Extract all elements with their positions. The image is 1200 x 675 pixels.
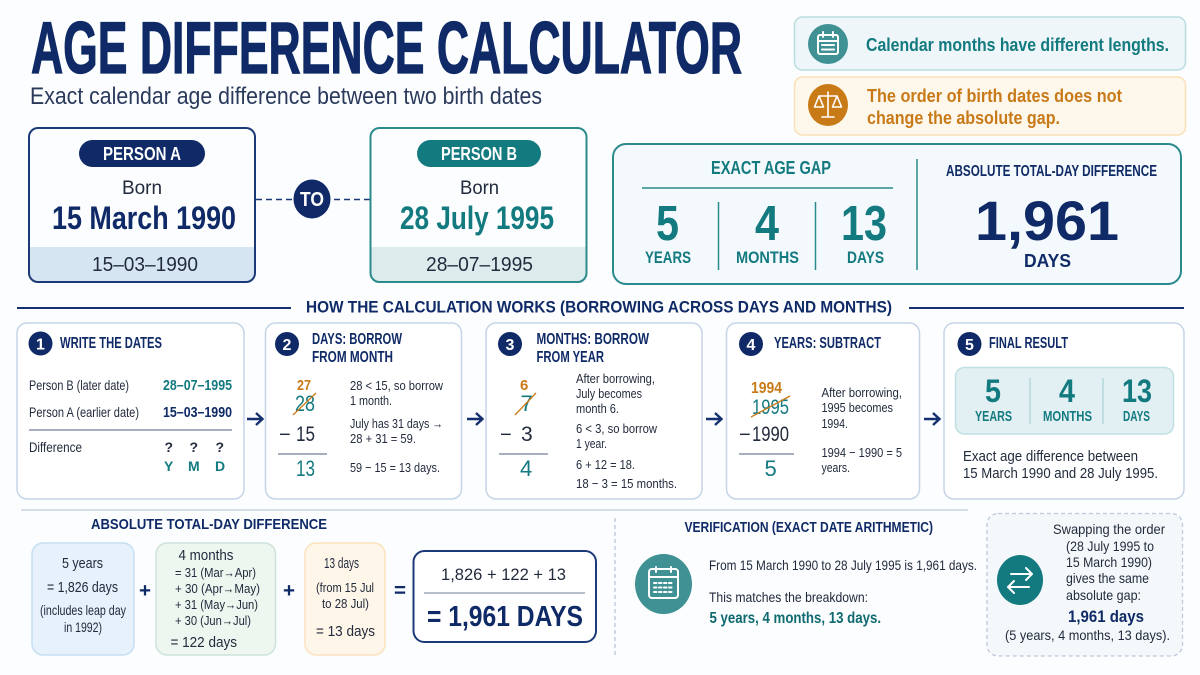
panel: step 5 final result: YEARS [975,408,1012,425]
panel: exact age gap and total days: 5 [656,197,679,251]
panel: swapping the order [987,514,1182,656]
panel: swapping the order: Swapping the order [1053,521,1165,537]
panel: step 3 months borrow: 3 [521,423,533,446]
panel: step 1 write the dates [17,323,244,499]
panel: step 2 days borrow: 28 + 31 = 59. [350,431,416,446]
panel: exact age gap and total days: YEARS [645,249,691,267]
section heading: how the calculation works: HOW THE CALCULATION WORKS (BORROWING ACROSS DAYS AND MONTHS) [306,298,892,316]
heading: absolute total-day difference: ABSOLUTE TOTAL-DAY DIFFERENCE [91,516,327,533]
panel: exact age gap and total days [613,144,1181,284]
panel: step 4 years subtract: 4 [746,337,756,354]
panel: step 1 write the dates: D [215,458,225,474]
panel: exact age gap and total days: 4 [755,197,779,251]
panel: step 5 final result: FINAL RESULT [989,335,1068,352]
panel: step 4 years subtract: − [739,424,751,446]
panel: step 5 final result: 5 [985,373,1001,409]
panel: swapping the order: 15 March 1990) [1066,554,1152,570]
panel: step 2 days borrow: 2 [282,337,292,354]
panel: step 3 months borrow: July becomes [576,386,642,401]
connector: to: TO [300,189,324,211]
panel: step 2 days borrow [266,323,462,499]
panel: step 4 years subtract: 1994 [751,380,782,397]
panel: step 2 days borrow: July has 31 days → [350,416,443,431]
panel: step 3 months borrow: FROM YEAR [536,349,604,366]
panel: step 2 days borrow: FROM MONTH [312,349,393,366]
panel: step 3 months borrow: 6 + 12 = 18. [576,457,635,472]
arrow: step 4 to 5 [924,413,940,425]
panel: step 5 final result: DAYS [1123,408,1150,425]
panel: step 3 months borrow [486,323,702,499]
box: 4 months: 4 months [178,547,234,564]
panel: step 5 final result: Exact age difference between [963,448,1138,465]
panel: step 2 days borrow: − [279,424,291,446]
box: 4 months: + 30 (Apr→May) [175,581,260,596]
panel: exact age gap and total days: 1,961 [975,189,1119,252]
box: 5 years: in 1992) [64,619,102,635]
panel: step 3 months borrow: 6 [520,377,528,394]
panel: person B: 28 July 1995 [400,200,554,236]
panel: person A: PERSON A [103,143,181,164]
panel: step 3 months borrow: 6 < 3, so borrow [576,421,658,436]
operator: equals: = [394,580,406,602]
panel: exact age gap and total days: 13 [841,197,887,251]
panel: step 5 final result: MONTHS [1043,408,1092,425]
panel: step 1 write the dates: Y [164,458,174,474]
panel: person A: Born [122,178,162,199]
panel: step 3 months borrow: MONTHS: BORROW [536,331,649,348]
panel: person B: PERSON B [441,143,517,164]
box: 5 years [32,543,134,655]
panel: swapping the order: gives the same [1066,570,1149,586]
operator: plus: + [139,580,151,602]
box: total result: = 1,961 DAYS [427,601,583,633]
panel: step 1 write the dates: M [188,458,200,474]
arrow: step 1 to 2 [247,413,262,425]
panel: exact age gap and total days: DAYS [847,249,884,267]
panel: step 4 years subtract: years. [822,460,850,475]
arrow: step 3 to 4 [706,413,722,425]
panel: step 4 years subtract: 5 [764,456,777,481]
panel: step 2 days borrow: 28 [295,391,315,416]
box: 13 days [305,543,385,655]
box: 4 months [156,543,276,655]
panel: person B: Born [460,178,499,199]
panel: swapping the order: 1,961 days [1068,607,1144,626]
arrow: step 2 to 3 [467,413,482,425]
panel: step 1 write the dates: 28–07–1995 [163,377,232,394]
panel: step 2 days borrow: 59 − 15 = 13 days. [350,460,440,475]
box: 5 years: = 1,826 days [47,579,118,596]
panel: verification: 5 years, 4 months, 13 days. [710,610,881,627]
panel: step 3 months borrow: 4 [520,456,532,481]
panel: step 1 write the dates: ? [164,439,173,455]
panel: verification: This matches the breakdown: [709,589,868,605]
box: 13 days: 13 days [324,555,359,572]
panel: verification [635,520,977,627]
callout: calendar months [794,17,1186,70]
panel: step 2 days borrow: 1 month. [350,393,392,408]
panel: exact age gap and total days: MONTHS [736,249,799,267]
subtitle: Exact calendar age difference between two birth dates [30,83,542,110]
panel: step 1 write the dates: Person B (later date) [29,377,129,393]
box: total result [414,551,596,642]
panel: step 3 months borrow: After borrowing, [576,371,655,386]
callout: order of dates: The order of birth dates does not [867,85,1122,106]
panel: person B: 28–07–1995 [426,254,533,276]
box: 4 months: = 122 days [170,634,237,651]
panel: verification: From 15 March 1990 to 28 July 1995 is 1,961 days. [709,557,977,573]
panel: swapping the order: (5 years, 4 months, 13 days). [1005,627,1170,643]
panel: exact age gap and total days: EXACT AGE GAP [711,158,831,178]
panel: step 1 write the dates: ? [216,439,224,455]
panel: swapping the order: absolute gap: [1066,587,1141,603]
panel: step 5 final result [944,323,1184,499]
panel: step 1 write the dates: ? [190,439,198,455]
panel: person B [370,128,586,282]
panel: exact age gap and total days: DAYS [1024,251,1071,271]
panel: step 1 write the dates: Person A (earlier date) [29,404,139,420]
connector: to [256,180,370,218]
panel: step 5 final result: 15 March 1990 and 28 July 1995. [963,465,1158,482]
box: 5 years: 5 years [62,555,103,572]
panel: step 4 years subtract: 1994. [822,416,848,431]
panel: person A: 15 March 1990 [52,200,236,236]
panel: person A [29,128,255,282]
box: 4 months: + 31 (May→Jun) [175,597,258,612]
panel: step 4 years subtract: After borrowing, [822,385,902,400]
panel: step 1 write the dates: Difference [29,439,82,455]
title: AGE DIFFERENCE CALCULATOR [31,8,742,89]
panel: verification: VERIFICATION (EXACT DATE ARITHMETIC) [684,520,933,536]
panel: step 5 final result: 4 [1059,373,1075,409]
panel: step 2 days borrow: 27 [297,377,311,394]
panel: step 3 months borrow: 1 year. [576,436,607,451]
panel: step 1 write the dates: 1 [36,336,45,354]
box: 13 days: (from 15 Jul [316,580,374,595]
panel: step 2 days borrow: 15 [296,423,315,446]
panel: step 4 years subtract: 1995 becomes [822,400,893,415]
box: 4 months: + 30 (Jun→Jul) [175,613,251,628]
panel: step 2 days borrow: 13 [296,456,315,481]
panel: step 1 write the dates: 15–03–1990 [163,404,232,421]
callout: order of dates: change the absolute gap. [867,107,1060,128]
panel: step 4 years subtract: 1995 [752,396,789,419]
panel: step 2 days borrow: 28 < 15, so borrow [350,378,444,393]
panel: step 3 months borrow: 7 [520,391,533,416]
panel: person A: 15–03–1990 [92,254,198,276]
panel: step 3 months borrow: month 6. [576,401,619,416]
panel: step 3 months borrow: − [500,424,512,446]
panel: step 3 months borrow: 3 [506,337,514,354]
box: total result: 1,826 + 122 + 13 [441,565,566,584]
box: 13 days: to 28 Jul) [322,596,369,611]
box: 5 years: (includes leap day [40,602,126,618]
icon: calendar [635,554,692,614]
icon: swap arrows [997,555,1043,605]
panel: step 3 months borrow: 18 − 3 = 15 months. [576,476,677,491]
panel: step 2 days borrow: DAYS: BORROW [312,331,402,348]
panel: step 4 years subtract: 1994 − 1990 = 5 [822,445,902,460]
panel: step 4 years subtract [726,323,920,499]
box: 4 months: = 31 (Mar→Apr) [175,565,256,580]
panel: step 5 final result: 5 [965,337,974,354]
panel: swapping the order: (28 July 1995 to [1066,538,1154,554]
panel: step 5 final result: 13 [1122,373,1152,409]
operator: plus: + [283,580,295,602]
panel: step 4 years subtract: YEARS: SUBTRACT [774,335,881,352]
panel: step 1 write the dates: WRITE THE DATES [60,335,162,352]
panel: step 4 years subtract: 1990 [752,423,789,446]
box: 13 days: = 13 days [316,623,375,640]
callout: order of dates [794,77,1186,135]
